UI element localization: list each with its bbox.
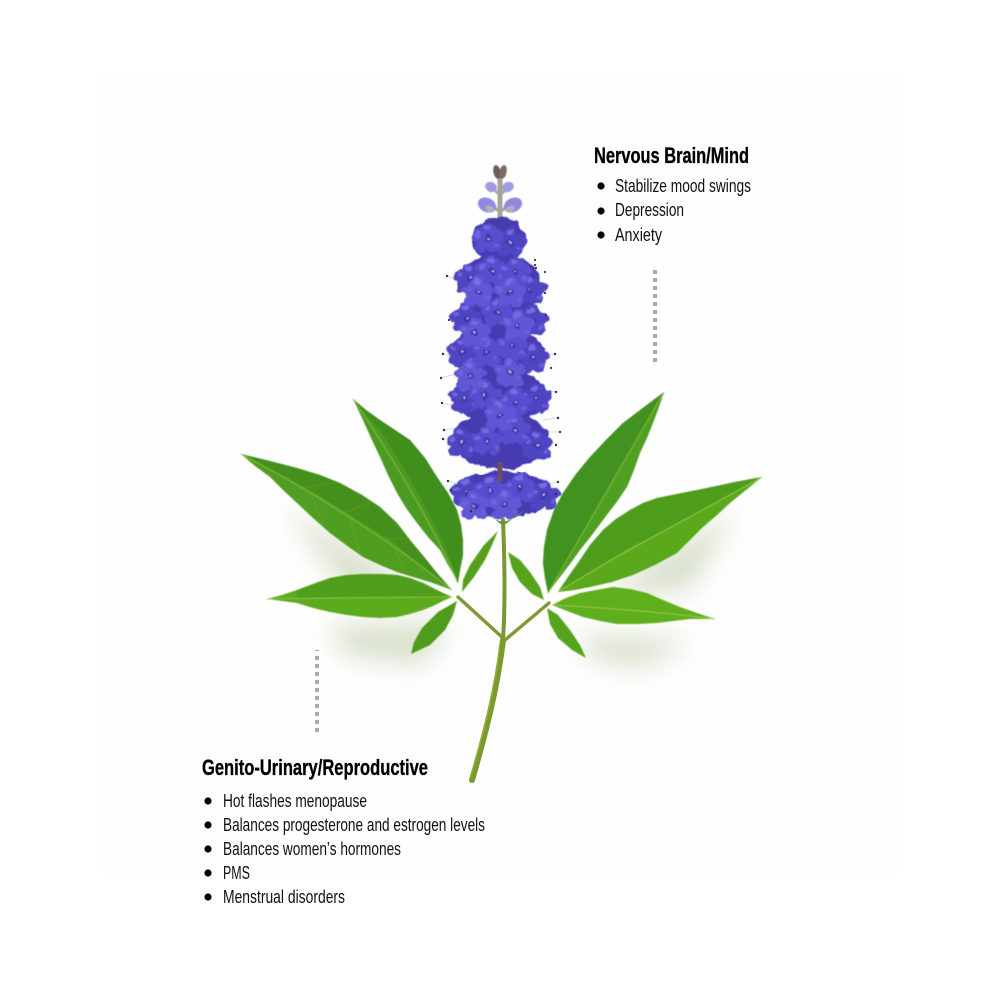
leaf: left outer <box>241 454 452 590</box>
bullet list: nervous: Depression <box>615 200 684 220</box>
flower stamen dots <box>440 259 561 512</box>
heading: Genito-Urinary/Reproductive: Genito-Urinary/Reproductive <box>202 755 428 780</box>
leaf: right small lower <box>547 608 586 658</box>
bullet list: nervous: Anxiety <box>615 225 662 245</box>
bullet list: reproductive <box>204 791 485 907</box>
bullet list: reproductive: Balances women’s hormones <box>223 839 401 859</box>
flower calyx <box>490 510 524 526</box>
flower clusters <box>446 217 560 520</box>
leaf: right small upper <box>508 552 544 600</box>
leaf shadows <box>285 505 735 665</box>
leaf: left small lower <box>411 601 457 654</box>
text block: Nervous Brain/Mind <box>594 143 751 245</box>
heading: Nervous Brain/Mind: Nervous Brain/Mind <box>594 143 749 168</box>
plant illustration <box>241 164 762 780</box>
bullet list: nervous: Stabilize mood swings <box>615 176 751 196</box>
leaf: left low <box>267 574 452 618</box>
leaf: right low <box>552 587 715 624</box>
flower stem gaps <box>476 462 526 482</box>
leaf: left top <box>353 399 463 583</box>
flower spike <box>440 164 561 526</box>
text block: Genito-Urinary/Reproductive <box>202 755 485 907</box>
bullet list: reproductive: Hot flashes menopause <box>223 791 367 811</box>
dotted connector: reproductive <box>315 650 319 732</box>
right leaves <box>508 392 762 658</box>
dotted connector: nervous <box>653 270 657 362</box>
plant stem and branches <box>458 520 549 780</box>
bullet list: reproductive: Balances progesterone and estrogen levels <box>223 815 485 835</box>
bullet list: nervous <box>597 176 751 245</box>
left leaves <box>241 399 498 654</box>
leaf: right long <box>558 477 762 592</box>
flower stamens <box>441 276 560 486</box>
leaf: left small upper <box>462 531 498 592</box>
bullet list: reproductive: PMS <box>223 863 250 883</box>
bullet list: reproductive: Menstrual disorders <box>223 887 345 907</box>
flower stalk tip and buds <box>475 164 525 225</box>
leaf: right upper <box>543 392 664 593</box>
